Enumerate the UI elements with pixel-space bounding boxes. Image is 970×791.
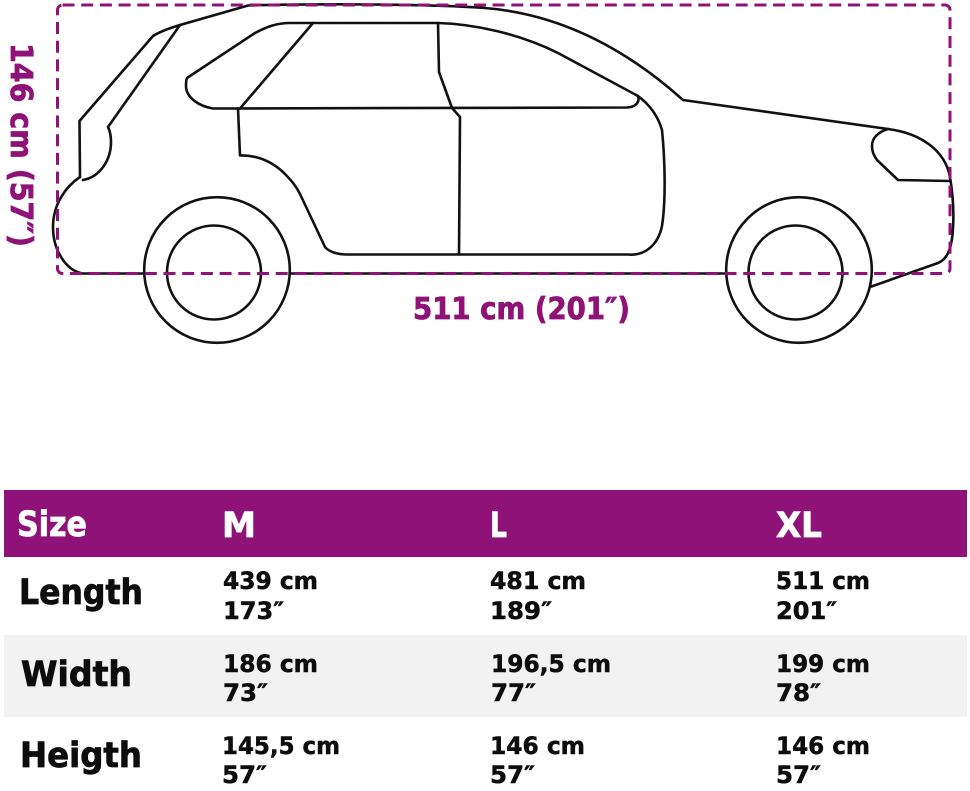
row: height: 146 cm — [776, 732, 870, 760]
table header row: XL — [776, 506, 822, 546]
door divider — [438, 23, 460, 254]
underbody line — [290, 272, 726, 275]
table header row: L — [490, 506, 507, 546]
row: height: 57″ — [490, 761, 535, 789]
row: length: Length — [19, 573, 143, 613]
row: width: Width — [21, 655, 132, 695]
row: width: 78″ — [776, 679, 821, 707]
panel: size table — [4, 490, 967, 789]
row: height: 145,5 cm — [222, 732, 340, 760]
headlight — [872, 129, 950, 181]
row: height: 57″ — [776, 761, 821, 789]
row: length: 439 cm — [223, 567, 318, 595]
row: width: 186 cm — [223, 650, 318, 678]
row: width: 199 cm — [776, 650, 870, 678]
row: width: 77″ — [491, 679, 536, 707]
row: length — [19, 567, 870, 625]
rear wheel — [144, 197, 290, 343]
car body outline — [53, 4, 953, 287]
row: height: 146 cm — [490, 732, 585, 760]
table header row: M — [222, 506, 256, 546]
row: length: 511 cm — [776, 567, 870, 595]
table header row: Size — [17, 505, 87, 545]
height dimension label: 146 cm (57″) — [3, 43, 38, 247]
row: height: 57″ — [222, 761, 267, 789]
row: width: 73″ — [223, 679, 268, 707]
door panel outline — [238, 96, 665, 255]
row: width: 196,5 cm — [491, 650, 611, 678]
row: height — [20, 732, 870, 789]
row: length: 189″ — [490, 597, 552, 625]
row: height: Heigth — [20, 736, 142, 776]
length dimension label: 511 cm (201″) — [413, 292, 630, 327]
table header row — [4, 490, 967, 557]
row: width — [4, 635, 967, 717]
dashed size boundary — [58, 5, 950, 274]
window pillar — [240, 23, 313, 108]
row: length: 173″ — [223, 597, 284, 625]
side windows — [186, 23, 639, 108]
row: length: 201″ — [776, 597, 837, 625]
panel: car diagram — [3, 4, 953, 343]
tail light — [83, 25, 180, 180]
row: length: 481 cm — [490, 567, 586, 595]
car outline drawing — [53, 4, 953, 343]
front wheel — [726, 197, 872, 343]
